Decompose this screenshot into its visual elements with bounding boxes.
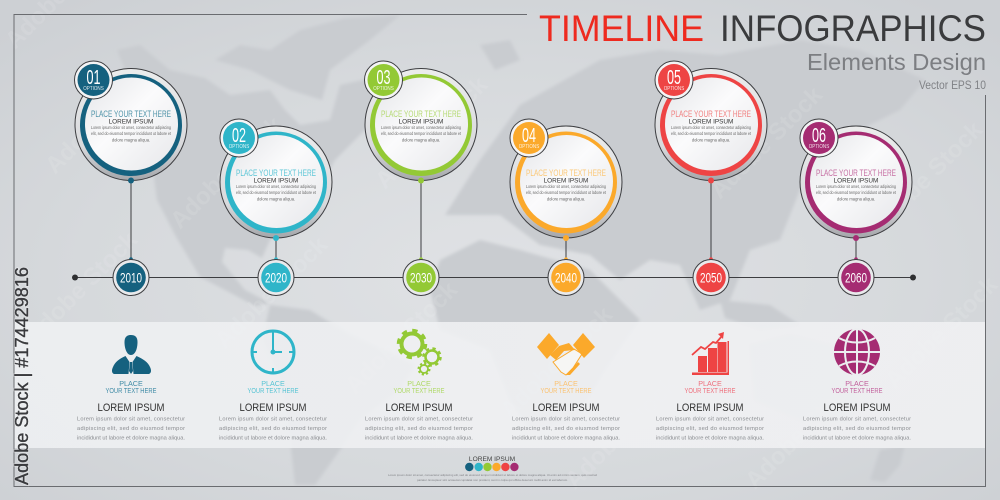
footer small print: pariatur. Excepteur sint occaecat cupidatat non proident, sunt in culpa qui officia deserunt mollit anim id est laborum. xyxy=(417,478,568,482)
card text 04: LOREM IPSUM xyxy=(544,178,588,184)
watermarks: Adobe Stock xyxy=(370,71,493,194)
watermarks: Adobe Stock xyxy=(210,231,333,354)
column 5 text: PLACE xyxy=(698,379,722,388)
watermarks: Adobe Stock xyxy=(880,271,1000,394)
timeline axis xyxy=(72,274,916,280)
card text 05: dolore magna aliqua. xyxy=(692,138,730,142)
stock id watermark: Adobe Stock | #174429816 xyxy=(11,267,32,485)
column 6 text: Lorem ipsum dolor sit amet, consectetur xyxy=(803,416,911,422)
icon: clock xyxy=(252,331,294,373)
world map xyxy=(117,15,925,485)
column 4 text: PLACE xyxy=(554,379,578,388)
card text 04: PLACE YOUR TEXT HERE xyxy=(526,168,606,178)
column 5 text: YOUR TEXT HERE xyxy=(684,386,736,395)
year 2020: 2020 xyxy=(265,270,287,286)
column 4 text xyxy=(512,379,620,442)
milestone 04 xyxy=(510,119,622,296)
card text 05: LOREM IPSUM xyxy=(689,118,733,126)
card text 06 xyxy=(816,168,897,202)
card text 03: LOREM IPSUM xyxy=(399,118,443,126)
watermarks: Adobe Stock xyxy=(495,301,618,424)
card text 01: PLACE YOUR TEXT HERE xyxy=(91,109,171,119)
column 6 text: incididunt ut labore et dolore magna aliqua. xyxy=(803,436,911,442)
watermarks: Adobe xyxy=(40,107,112,179)
column 2 text: incididunt ut labore et dolore magna aliqua. xyxy=(219,436,327,442)
card text 02: elit, sed do eiusmod tempor incididunt ut labore et xyxy=(236,190,317,195)
card text 04: dolore magna aliqua. xyxy=(547,196,585,202)
column 4 text: YOUR TEXT HERE xyxy=(540,386,592,395)
card text 04 xyxy=(526,168,607,202)
column 1 text: adipiscing elit, sed do eiusmod tempor xyxy=(77,426,185,432)
badge 04: 04 xyxy=(522,125,536,147)
milestone 05 xyxy=(655,61,767,296)
column 3 text: incididunt ut labore et dolore magna aliqua. xyxy=(365,436,473,442)
year 2050: 2050 xyxy=(700,270,722,286)
icon: growth chart xyxy=(692,332,729,375)
card text 03 xyxy=(381,109,462,142)
card text 03: dolore magna aliqua. xyxy=(402,138,440,142)
column 6 text: PLACE xyxy=(845,379,869,388)
milestone 06 xyxy=(800,119,912,296)
watermarks: Adobe Stock xyxy=(340,276,463,399)
column 2 text: YOUR TEXT HERE xyxy=(248,386,299,395)
column 3 text: Lorem ipsum dolor sit amet, consectetur xyxy=(365,416,473,422)
bottom panel xyxy=(14,322,986,448)
badge 06: 06 xyxy=(812,125,826,147)
column 5 text: Lorem ipsum dolor sit amet, consectetur xyxy=(656,416,764,422)
card text 05 xyxy=(671,109,752,142)
card text 01: LOREM IPSUM xyxy=(109,118,153,126)
card text 05: Lorem ipsum dolor sit amet, consectetur adipiscing xyxy=(671,125,752,130)
column 1 text: Lorem ipsum dolor sit amet, consectetur xyxy=(77,416,185,422)
year 2050 xyxy=(693,260,729,296)
watermarks: Adobe Stock xyxy=(705,81,828,204)
column 3 text: LOREM IPSUM xyxy=(386,402,452,414)
column 5 text: incididunt ut labore et dolore magna aliqua. xyxy=(656,436,764,442)
card text 03: PLACE YOUR TEXT HERE xyxy=(381,109,461,119)
badge 02: OPTIONS xyxy=(229,144,250,150)
watermarks: Adobe Stock xyxy=(865,116,988,239)
card text 01: elit, sed do eiusmod tempor incididunt ut labore et xyxy=(91,131,172,136)
year 2060: 2060 xyxy=(845,270,867,286)
column 2 text: Lorem ipsum dolor sit amet, consectetur xyxy=(219,416,327,422)
icon: globe xyxy=(834,329,880,375)
footer small print: Lorem ipsum dolor sit amet, consectetur adipiscing elit, sed do eiusmod tempor incididunt ut labore et dolore magna aliqua. Ut enim ad minim veniam, quis nostrud xyxy=(388,473,597,477)
badge 01: 01 xyxy=(86,67,100,89)
year 2030 xyxy=(403,260,439,296)
footer colour dots xyxy=(465,463,519,471)
stock id watermark: Adobe Stock | #174429816 xyxy=(11,267,32,485)
column 2 text: PLACE xyxy=(261,379,285,388)
badge 01 xyxy=(74,61,112,99)
column 3 text: YOUR TEXT HERE xyxy=(394,386,445,395)
column 6 text: adipiscing elit, sed do eiusmod tempor xyxy=(803,426,911,432)
vector note: Vector EPS 10 xyxy=(919,80,986,92)
badge 03 xyxy=(364,61,402,99)
card text 02: dolore magna aliqua. xyxy=(257,196,295,202)
title: INFOGRAPHICS xyxy=(720,7,986,49)
column 4 text: LOREM IPSUM xyxy=(532,402,600,414)
badge 06: OPTIONS xyxy=(809,144,830,150)
card text 02: Lorem ipsum dolor sit amet, consectetur adipiscing xyxy=(236,184,317,189)
badge 01: OPTIONS xyxy=(83,86,104,92)
milestone 03 xyxy=(364,61,477,296)
card text 02 xyxy=(236,168,317,202)
year 2040 xyxy=(548,260,584,296)
milestone 02 xyxy=(220,119,332,296)
year 2040: 2040 xyxy=(555,270,577,286)
badge 03: OPTIONS xyxy=(373,86,394,92)
card text 06: Lorem ipsum dolor sit amet, consectetur adipiscing xyxy=(816,184,897,189)
column 3 text: adipiscing elit, sed do eiusmod tempor xyxy=(365,426,473,432)
badge 02 xyxy=(220,119,258,157)
watermarks: Adobe Stock xyxy=(165,111,288,234)
year 2060 xyxy=(838,260,874,296)
badge 06 xyxy=(800,119,838,157)
column 5 text: LOREM IPSUM xyxy=(676,402,744,414)
badge 02: 02 xyxy=(232,125,246,147)
column 4 text: Lorem ipsum dolor sit amet, consectetur xyxy=(512,416,620,422)
title: TIMELINE xyxy=(539,7,704,49)
card text 05: elit, sed do eiusmod tempor incididunt ut labore et xyxy=(671,131,752,136)
column 6 text: LOREM IPSUM xyxy=(824,402,890,414)
title xyxy=(539,7,986,49)
column 2 text: adipiscing elit, sed do eiusmod tempor xyxy=(219,426,327,432)
column 6 text: YOUR TEXT HERE xyxy=(832,386,883,395)
column 1 text xyxy=(77,379,185,442)
footer small print xyxy=(388,473,597,482)
card text 06: elit, sed do eiusmod tempor incididunt ut labore et xyxy=(816,190,897,195)
badge 03: 03 xyxy=(376,67,390,89)
year 2030: 2030 xyxy=(410,270,432,286)
card text 06: dolore magna aliqua. xyxy=(837,196,875,202)
card text 01: dolore magna aliqua. xyxy=(112,138,150,142)
footer heading: LOREM IPSUM xyxy=(469,456,515,463)
column 1 text: YOUR TEXT HERE xyxy=(106,386,157,395)
year 2020 xyxy=(258,260,294,296)
badge 04: OPTIONS xyxy=(519,144,540,150)
watermarks: Adobe Stock xyxy=(20,226,143,349)
badge 04 xyxy=(510,119,548,157)
column 4 text: incididunt ut labore et dolore magna aliqua. xyxy=(512,436,620,442)
card text 06: PLACE YOUR TEXT HERE xyxy=(816,168,896,178)
column 1 text: PLACE xyxy=(119,379,143,388)
column 3 text: PLACE xyxy=(407,379,431,388)
year 2010: 2010 xyxy=(120,270,142,286)
column 6 text xyxy=(803,379,911,442)
column 4 text: adipiscing elit, sed do eiusmod tempor xyxy=(512,426,620,432)
card text 04: Lorem ipsum dolor sit amet, consectetur adipiscing xyxy=(526,184,607,189)
year 2010 xyxy=(113,260,149,296)
card text 05: PLACE YOUR TEXT HERE xyxy=(671,109,751,119)
column 1 text: incididunt ut labore et dolore magna aliqua. xyxy=(77,436,185,442)
icon: handshake xyxy=(537,333,595,375)
card text 01 xyxy=(91,109,172,142)
badge 05 xyxy=(655,61,693,99)
icon: businessman xyxy=(112,335,151,374)
card text 02: LOREM IPSUM xyxy=(254,178,298,184)
card text 03: Lorem ipsum dolor sit amet, consectetur adipiscing xyxy=(381,125,462,130)
watermarks: Adobe Stock xyxy=(740,371,863,494)
icon: gears xyxy=(398,330,440,374)
card text 01: Lorem ipsum dolor sit amet, consectetur adipiscing xyxy=(91,125,172,130)
column 2 text: LOREM IPSUM xyxy=(240,402,306,414)
card text 03: elit, sed do eiusmod tempor incididunt ut labore et xyxy=(381,131,462,136)
subtitle: Elements Design xyxy=(807,49,986,75)
milestone 01 xyxy=(74,61,187,296)
card text 04: elit, sed do eiusmod tempor incididunt ut labore et xyxy=(526,190,607,195)
column 3 text xyxy=(365,379,473,442)
column 5 text xyxy=(656,379,764,442)
column 2 text xyxy=(219,379,327,442)
badge 05: OPTIONS xyxy=(664,86,685,92)
badge 05: 05 xyxy=(667,67,681,89)
column 1 text: LOREM IPSUM xyxy=(98,402,164,414)
card text 06: LOREM IPSUM xyxy=(834,178,878,184)
watermarks: Adobe Stock xyxy=(560,371,683,494)
card text 02: PLACE YOUR TEXT HERE xyxy=(236,168,316,178)
column 5 text: adipiscing elit, sed do eiusmod tempor xyxy=(656,426,764,432)
